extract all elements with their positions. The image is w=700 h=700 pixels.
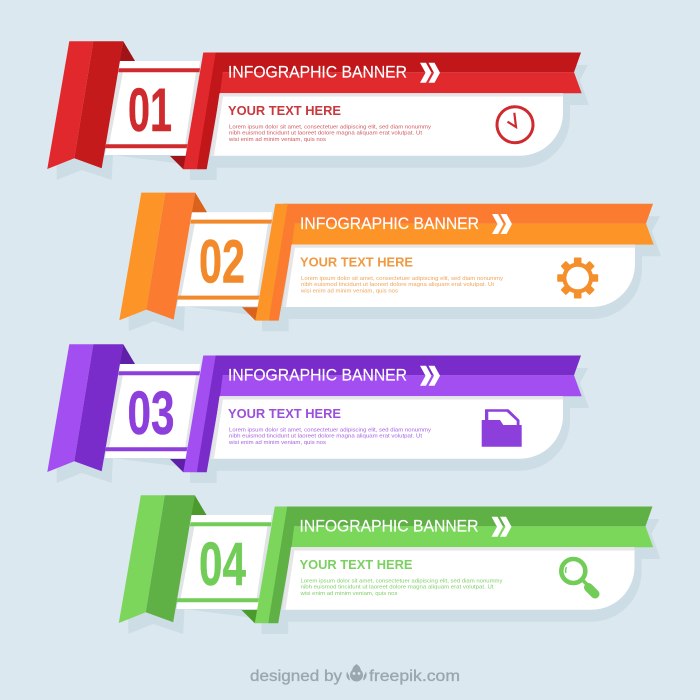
icon: magnifier — [561, 559, 595, 594]
number panel: 04 — [199, 530, 246, 598]
content card: Lorem ipsum dolor sit amet, consectetuer adipiscing elit, sed diam nonummy — [229, 124, 431, 130]
icon: clock — [497, 107, 533, 143]
content card: nibh euismod tincidunt ut laoreet dolore magna aliquam erat volutpat. Ut — [229, 434, 422, 440]
chevrons — [492, 214, 512, 234]
icon: folder — [482, 409, 522, 447]
footer credit: freepik.com — [369, 668, 460, 685]
header band: INFOGRAPHIC BANNER — [300, 215, 479, 233]
header band — [170, 52, 582, 169]
content card: YOUR TEXT HERE — [228, 103, 341, 118]
banner 2: orange — [119, 193, 661, 331]
number panel — [104, 61, 200, 155]
banner 1: red — [47, 41, 589, 180]
content card — [210, 396, 563, 459]
content card: YOUR TEXT HERE — [228, 406, 341, 421]
icon: gear — [557, 258, 598, 298]
left ribbon — [119, 495, 206, 623]
content card — [282, 547, 634, 610]
content card: Lorem ipsum dolor sit amet, consectetuer adipiscing elit, sed diam nonummy — [300, 578, 503, 584]
left ribbon — [119, 193, 207, 320]
content card: wisi enim ad minim veniam, quis nos — [228, 440, 326, 446]
number panel: 02 — [199, 227, 245, 295]
footer credit — [250, 664, 460, 685]
header band — [242, 506, 653, 623]
header band: INFOGRAPHIC BANNER — [228, 64, 407, 82]
header band: INFOGRAPHIC BANNER — [300, 518, 479, 536]
left ribbon — [47, 41, 135, 169]
content card: nibh euismod tincidunt ut laoreet dolore magna aliquam erat volutpat. Ut — [300, 585, 494, 591]
footer credit: designed by — [250, 668, 342, 685]
header band — [242, 204, 654, 321]
content card: YOUR TEXT HERE — [300, 557, 413, 572]
number panel: 03 — [128, 379, 174, 447]
content card: wisi enim ad minim veniam, quis nos — [299, 591, 398, 597]
content card — [282, 245, 635, 307]
content card — [210, 93, 563, 156]
content card: nibh euismod tincidunt ut laoreet dolore magna aliquam erat volutpat. Ut — [229, 131, 422, 137]
number panel: 01 — [128, 76, 172, 144]
content card: Lorem ipsum dolor sit amet, consectetuer adipiscing elit, sed diam nonummy — [229, 428, 431, 434]
content card: YOUR TEXT HERE — [300, 254, 413, 269]
content card: nibh euismod tincidunt ut laoreet dolore magna aliquam erat volutpat. Ut — [301, 282, 494, 288]
banner 3: purple — [47, 344, 589, 483]
banner 4: green — [119, 495, 661, 634]
chevrons — [492, 517, 512, 537]
left ribbon — [47, 344, 135, 472]
chevrons — [420, 366, 440, 386]
header band — [170, 356, 582, 472]
content card: wisi enim ad minim veniam, quis nos — [228, 137, 326, 143]
number panel — [176, 212, 272, 306]
icon: freepik logo — [346, 664, 367, 682]
number panel — [104, 364, 200, 458]
chevrons — [420, 63, 440, 83]
header band: INFOGRAPHIC BANNER — [228, 366, 407, 384]
number panel — [176, 515, 272, 609]
content card: wisi enim ad minim veniam, quis nos — [300, 288, 398, 294]
content card: Lorem ipsum dolor sit amet, consectetuer adipiscing elit, sed diam nonummy — [301, 276, 503, 282]
